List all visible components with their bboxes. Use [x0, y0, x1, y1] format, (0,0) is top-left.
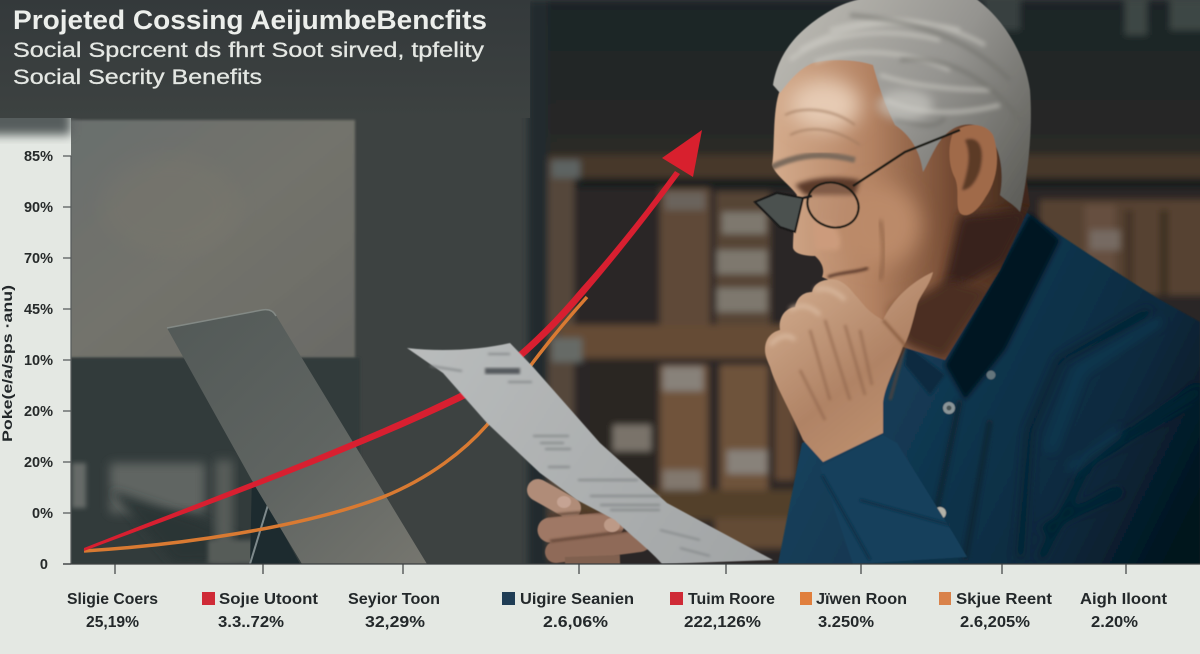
glasses: [755, 130, 960, 235]
subtitle line one: Social Spcrcent ds fhrt Soot sirved, tpfelity: [13, 39, 485, 62]
legend item 6: Jïwen Roon: [816, 591, 907, 608]
shirt: [778, 213, 1200, 564]
y axis: 0%: [32, 506, 53, 522]
legend item 5: Tuim Roore: [688, 591, 775, 608]
shirt buttons: [934, 370, 996, 519]
legend item 5: [670, 591, 775, 631]
shirt cuff: [820, 435, 967, 564]
y axis: 10%: [24, 353, 53, 369]
blurred window and room: [60, 120, 360, 564]
legend item 8: 2.20%: [1091, 614, 1138, 631]
head and neck: [772, 59, 1030, 361]
legend item 5: 222,126%: [684, 614, 761, 631]
legend item 6: [800, 591, 907, 631]
y axis: 20%: [24, 404, 53, 420]
red trend line with arrow: [84, 130, 702, 551]
legend item 3: [348, 591, 440, 631]
legend item 2: [202, 591, 319, 631]
legend item 1: [67, 591, 158, 631]
y axis: 20%: [24, 455, 53, 471]
subtitle line two: Social Secrity Benefits: [13, 66, 262, 89]
y axis: 85%: [24, 149, 53, 165]
hair: [773, 0, 1031, 212]
title header band: [0, 0, 530, 135]
legend item 4: Uigire Seanien: [520, 591, 634, 608]
chart title: Projeted Cossing AeijumbeBencfits: [13, 5, 487, 35]
y axis: 45%: [24, 302, 53, 318]
legend item 2: Sojıe Utoont: [219, 591, 319, 608]
paper document: [407, 343, 773, 564]
legend item 3: Seyior Toon: [348, 591, 440, 608]
y axis: 90%: [24, 200, 53, 216]
legend item 2: 3.3..72%: [218, 614, 284, 631]
legend item 7: 2.6,205%: [960, 614, 1030, 631]
hand holding paper: [538, 490, 645, 562]
hand under chin: [765, 272, 933, 462]
y axis: [24, 149, 71, 573]
legend item 1: 25,19%: [86, 614, 139, 631]
x axis: [63, 564, 1200, 574]
legend item 1: Sligie Coers: [67, 591, 158, 608]
y axis: 0: [40, 557, 48, 573]
y axis title: Poke(e/a/sps ·anu): [0, 285, 15, 442]
bookshelf: [528, 0, 1200, 580]
legend item 8: [1080, 591, 1168, 631]
legend item 6: 3.250%: [818, 614, 874, 631]
ear: [949, 125, 997, 215]
legend item 7: Skjue Reent: [956, 591, 1053, 608]
legend item 4: 2.6,06%: [543, 614, 608, 631]
person: [755, 0, 1200, 564]
legend item 8: Aigh Iloont: [1080, 591, 1168, 608]
legend item 3: 32,29%: [365, 614, 425, 631]
orange trend line: [84, 297, 587, 551]
legend item 7: [939, 591, 1053, 631]
legend item 4: [502, 591, 634, 631]
y axis: 70%: [24, 251, 53, 267]
laptop: [167, 310, 427, 564]
